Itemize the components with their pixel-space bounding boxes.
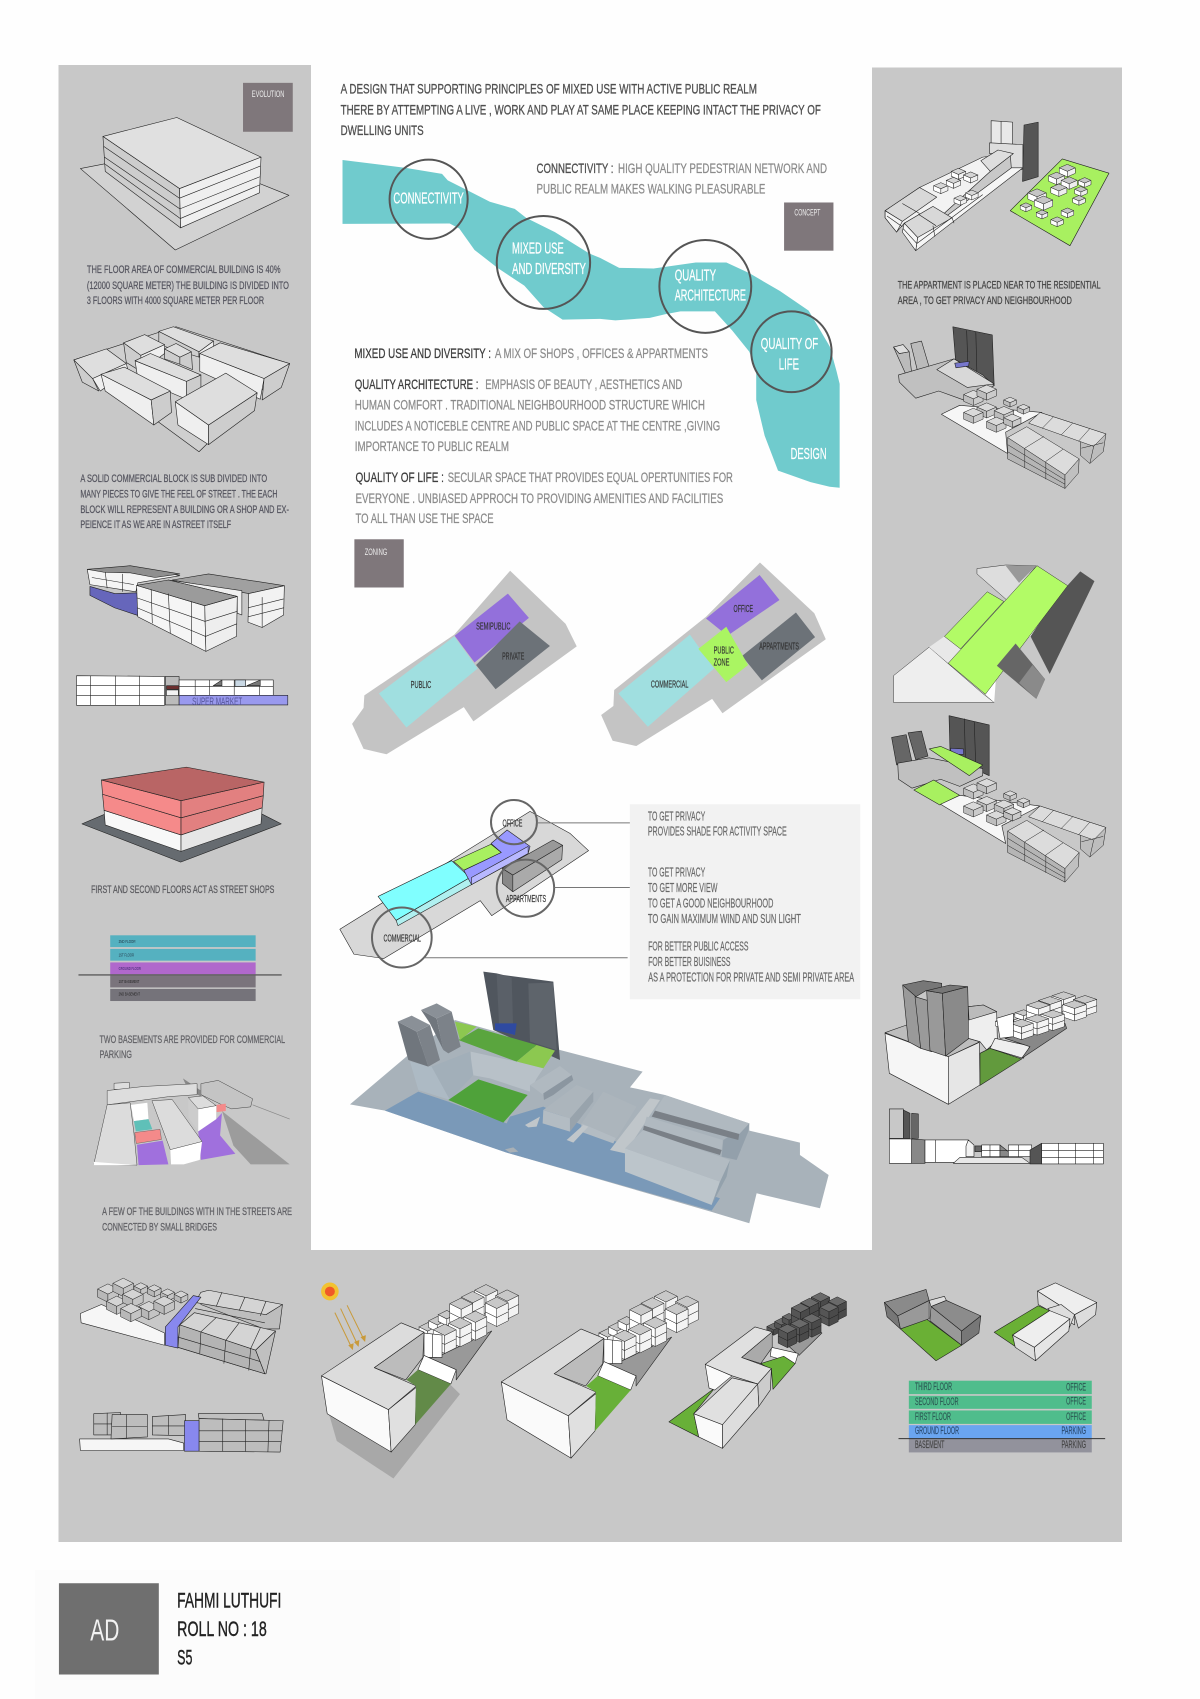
callout labels: OFFICE xyxy=(502,819,522,829)
zoning plan: public and private: SEMIPUBLIC xyxy=(476,622,511,632)
text: mixed use and diversity: A MIX OF SHOPS , OFFICES & APPARTMENTS xyxy=(495,347,708,362)
floor stack: office levels legend: SECOND FLOOR xyxy=(915,1396,959,1408)
circle: quality architecture xyxy=(659,240,751,333)
notes panel: TO GET PRIVACY xyxy=(648,809,705,823)
footer: author details: FAHMI LUTHUFI xyxy=(177,1589,281,1612)
floor stack: office levels legend: OFFICE xyxy=(1066,1381,1086,1394)
diagram: grey site model from rear xyxy=(894,327,1106,489)
caption: solid block: PEIENCE IT AS WE ARE IN ASTREET ITSELF xyxy=(80,518,231,531)
footer: author details: ROLL NO : 18 xyxy=(177,1617,267,1641)
zoning plan: functions: OFFICE xyxy=(734,604,753,615)
text: mixed use and diversity: MIXED USE AND DIVERSITY : xyxy=(354,347,491,362)
caption: basements: PARKING xyxy=(100,1048,132,1061)
floor stack: office levels legend xyxy=(899,1381,1105,1452)
label box: evolution: EVOLUTION xyxy=(252,89,284,99)
diagram: tower on podium with green court xyxy=(885,981,1097,1104)
notes panel: AS A PROTECTION FOR PRIVATE AND SEMI PRIVATE AREA xyxy=(648,970,854,984)
ribbon labels: AND DIVERSITY xyxy=(512,260,586,278)
text: quality architecture: EMPHASIS OF BEAUTY , AESTHETICS AND xyxy=(485,377,682,393)
callout labels xyxy=(383,819,546,944)
caption: appartment placement: AREA , TO GET PRIVACY AND NEIGHBOURHOOD xyxy=(898,294,1072,307)
caption: street shops: FIRST AND SECOND FLOORS ACT AS STREET SHOPS xyxy=(91,882,274,896)
label box: zoning: ZONING xyxy=(365,547,387,557)
diagram: model with supermarket level xyxy=(87,566,284,651)
ribbon labels: ARCHITECTURE xyxy=(675,287,746,305)
diagram: long section xyxy=(889,1109,1103,1164)
diagram: streets model with blue bridge xyxy=(80,1278,282,1374)
caption: solid block xyxy=(80,471,289,531)
ribbon labels: QUALITY xyxy=(675,267,716,284)
floor stack: commercial levels: 2ND BASEMENT xyxy=(119,992,140,998)
notes panel: PROVIDES SHADE FOR ACTIVITY SPACE xyxy=(648,824,787,839)
arrows: sun rays xyxy=(335,1305,366,1350)
text: quality architecture xyxy=(355,377,720,455)
circle: quality of life xyxy=(751,311,832,392)
intro text: THERE BY ATTEMPTING A LIVE , WORK AND PLAY AT SAME PLACE KEEPING INTACT THE PRIVACY OF xyxy=(341,103,821,118)
label box: concept: CONCEPT xyxy=(794,208,821,218)
ribbon labels: DESIGN xyxy=(791,445,827,463)
text: mixed use and diversity xyxy=(354,347,708,362)
zoning plan: functions: APPARTMENTS xyxy=(759,642,799,653)
floor stack: office levels legend: OFFICE xyxy=(1066,1411,1086,1423)
floor stack: office levels legend: GROUND FLOOR xyxy=(915,1425,959,1437)
notes panel: TO GET A GOOD NEIGHBOURHOOD xyxy=(648,896,773,910)
floor stack: commercial levels: GROUND FLOOR xyxy=(119,966,141,972)
circle: commercial xyxy=(372,907,432,967)
text: connectivity: CONNECTIVITY : xyxy=(537,161,613,177)
diagram: sun study, green court xyxy=(501,1291,698,1458)
massing plan with circled callouts xyxy=(340,800,631,967)
circle: mixed use xyxy=(497,216,590,309)
text: quality architecture: INCLUDES A NOTICEBLE CENTRE AND PUBLIC SPACE AT THE CENTRE ,GIVING xyxy=(355,419,720,434)
caption: small bridges: CONNECTED BY SMALL BRIDGES xyxy=(102,1221,217,1233)
caption: floor area: 3 FLOORS WITH 4000 SQUARE METER PER FLOOR xyxy=(87,294,264,307)
text: quality architecture: QUALITY ARCHITECTURE : xyxy=(355,377,478,393)
text: connectivity xyxy=(537,161,827,197)
ribbon xyxy=(343,160,840,488)
zoning plan: public and private: PUBLIC xyxy=(411,680,432,691)
leader lines xyxy=(425,823,631,958)
zoning plan: functions xyxy=(601,562,826,746)
zoning plan: functions: COMMERCIAL xyxy=(651,680,689,690)
diagram: sun study, shadow on site xyxy=(321,1285,519,1479)
text: quality of life xyxy=(356,471,733,527)
floor stack: office levels legend: OFFICE xyxy=(1066,1395,1086,1408)
diagram: street with small bridges xyxy=(94,1078,290,1165)
diagram: section with super market: SUPER MARKET xyxy=(192,694,242,708)
circle: connectivity xyxy=(390,160,468,239)
diagram: block subdivided into pieces xyxy=(74,327,290,452)
floor stack: commercial levels: 1ST FLOOR xyxy=(119,953,134,959)
circle: office xyxy=(491,800,537,844)
diagram: section with super market xyxy=(77,676,288,708)
notes panel xyxy=(630,804,860,999)
intro text xyxy=(341,82,821,139)
caption: basements xyxy=(100,1032,285,1061)
text: quality of life: EVERYONE . UNBIASED APPROCH TO PROVIDING AMENITIES AND FACILITIES xyxy=(356,491,723,507)
caption: solid block: MANY PIECES TO GIVE THE FEEL OF STREET . THE EACH xyxy=(80,487,277,500)
notes panel: FOR BETTER BUISINESS xyxy=(648,954,731,969)
ribbon labels xyxy=(393,190,827,463)
footer badge: AD: AD xyxy=(90,1614,119,1648)
floor stack: office levels legend: PARKING xyxy=(1062,1425,1086,1437)
text: quality architecture: HUMAN COMFORT . TRADITIONAL NEIGHBOURHOOD STRUCTURE WHICH xyxy=(355,398,705,413)
diagram: pink street shop floors xyxy=(82,767,281,862)
panel: grey backdrop with left, bottom and right bands xyxy=(58,65,1122,1542)
intro text: DWELLING UNITS xyxy=(341,123,424,139)
caption: small bridges: A FEW OF THE BUILDINGS WITH IN THE STREETS ARE xyxy=(102,1206,292,1218)
caption: appartment placement xyxy=(898,278,1101,307)
intro text: A DESIGN THAT SUPPORTING PRINCIPLES OF MIXED USE WITH ACTIVE PUBLIC REALM xyxy=(341,82,757,97)
caption: floor area: (12000 SQUARE METER) THE BUILDING IS DIVIDED INTO xyxy=(87,278,289,292)
diagram: section with blue bridge xyxy=(80,1412,283,1452)
notes panel: FOR BETTER PUBLIC ACCESS xyxy=(648,939,749,954)
circle: appartments xyxy=(497,860,554,917)
text: connectivity: HIGH QUALITY PEDESTRIAN NETWORK AND xyxy=(618,161,827,177)
zoning plan: public and private xyxy=(352,571,577,754)
label box: concept xyxy=(784,202,833,251)
label box: evolution xyxy=(243,83,293,132)
diagram: layered commercial block xyxy=(80,117,289,250)
caption: floor area: THE FLOOR AREA OF COMMERCIAL BUILDING IS 40% xyxy=(87,263,281,276)
footer: author details xyxy=(177,1589,281,1669)
notes panel: TO GET PRIVACY xyxy=(648,865,705,880)
callout labels: APPARTMENTS xyxy=(506,894,546,905)
floor stack: office levels legend: BASEMENT xyxy=(915,1439,945,1451)
text: quality architecture: IMPORTANCE TO PUBLIC REALM xyxy=(355,439,509,455)
diagram: office block, grey xyxy=(884,1289,981,1361)
icon: sun xyxy=(321,1282,339,1300)
floor stack: commercial levels: 2ND FLOOR xyxy=(119,939,136,945)
notes panel: TO GAIN MAXIMUM WIND AND SUN LIGHT xyxy=(648,911,801,926)
label box: zoning xyxy=(354,539,404,587)
floor stack: commercial levels: 1ST BASEMENT xyxy=(119,979,139,985)
caption: basements: TWO BASEMENTS ARE PROVIDED FOR COMMERCIAL xyxy=(100,1032,285,1046)
diagram: apartments beside residential xyxy=(885,121,1109,251)
floor stack: office levels legend: THIRD FLOOR xyxy=(915,1381,952,1393)
3D render of the scheme xyxy=(350,972,829,1223)
floor stack: commercial levels xyxy=(78,935,282,1001)
text: quality of life: SECULAR SPACE THAT PROVIDES EQUAL OPERTUNITIES FOR xyxy=(448,471,733,486)
floor stack: office levels legend: FIRST FLOOR xyxy=(915,1411,951,1423)
ribbon labels: CONNECTIVITY xyxy=(393,190,464,207)
callout labels: COMMERCIAL xyxy=(383,934,421,944)
zoning plan: functions: PUBLIC xyxy=(714,646,734,656)
notes panel: TO GET MORE VIEW xyxy=(648,881,718,895)
ribbon labels: LIFE xyxy=(779,356,799,373)
zoning plan: public and private: PRIVATE xyxy=(502,652,524,662)
caption: floor area xyxy=(87,263,289,307)
footer: author details: S5 xyxy=(177,1646,192,1669)
caption: solid block: A SOLID COMMERCIAL BLOCK IS SUB DIVIDED INTO xyxy=(80,471,267,485)
text: quality of life: TO ALL THAN USE THE SPACE xyxy=(356,512,494,527)
text: connectivity: PUBLIC REALM MAKES WALKING PLEASURABLE xyxy=(537,182,765,197)
text: quality of life: QUALITY OF LIFE : xyxy=(356,471,444,486)
ribbon labels: MIXED USE xyxy=(512,240,564,257)
ribbon labels: QUALITY OF xyxy=(761,336,818,353)
concept ribbon with circles xyxy=(343,160,840,488)
diagram: green roofs on site model xyxy=(892,716,1106,882)
caption: small bridges xyxy=(102,1206,292,1233)
zoning plan: functions: ZONE xyxy=(714,658,729,669)
diagram: sun study, dark residential xyxy=(669,1293,846,1448)
diagram: green terraces seen from above xyxy=(894,565,1094,702)
caption: solid block: BLOCK WILL REPRESENT A BUILDING OR A SHOP AND EX- xyxy=(80,502,289,516)
footer badge: AD xyxy=(59,1583,159,1675)
floor stack: office levels legend: PARKING xyxy=(1062,1439,1086,1451)
diagram: office block, white xyxy=(994,1283,1097,1361)
